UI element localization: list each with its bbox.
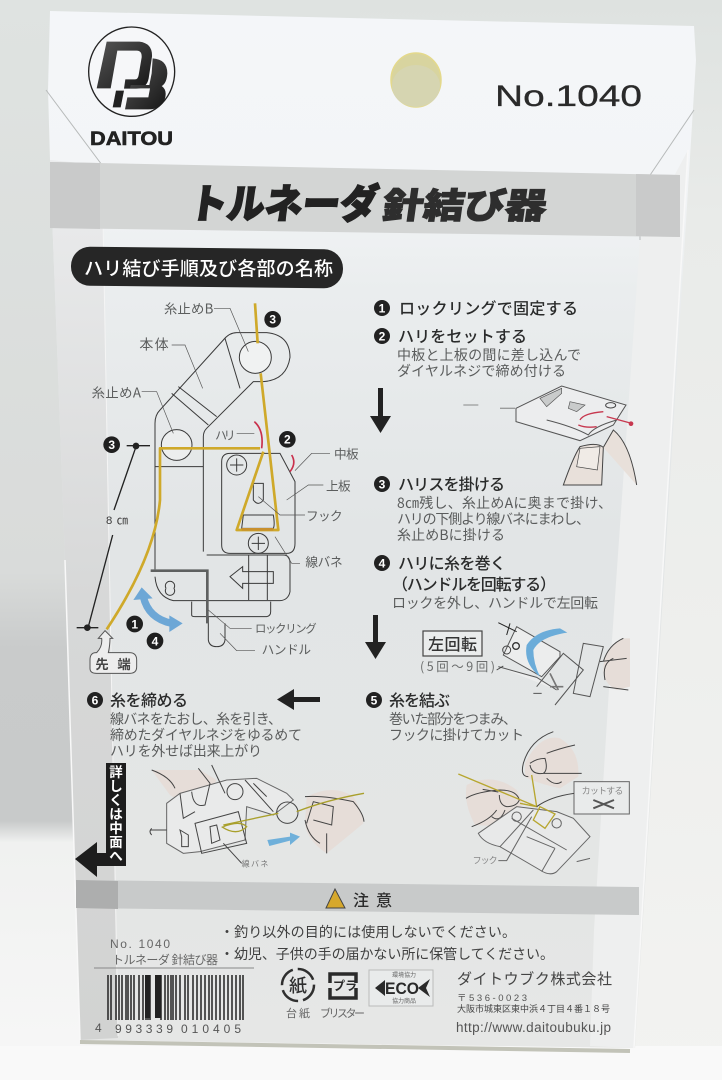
company info: 大阪市城東区東中浜４丁目４番１８号 (457, 1002, 610, 1015)
side note arrow: く (109, 789, 123, 809)
step 3: 8㎝残し、糸止めAに奥まで掛け、 (397, 493, 612, 513)
step 6: ハリを外せば出来上がり (110, 741, 262, 761)
step 4 (374, 550, 598, 613)
icon: plastic recycling: プラ (333, 977, 357, 994)
caution band (76, 880, 639, 915)
step 5: 糸を結ぶ (389, 687, 450, 711)
company info (456, 968, 612, 1035)
product name (94, 937, 254, 968)
title (186, 171, 552, 230)
icon: ECO mark (369, 970, 433, 1006)
step 2: ハリをセットする (398, 323, 527, 347)
step 2: ダイヤルネジで締め付ける (397, 361, 566, 381)
left turn label (420, 631, 495, 675)
hang hole (391, 53, 441, 107)
yellow line (107, 303, 278, 629)
step markers: 4 (152, 634, 159, 648)
step 3: 3 (379, 478, 386, 492)
step 4: ロックを外し、ハンドルで左回転 (392, 593, 598, 613)
part labels: ロックリング (255, 621, 317, 637)
side note arrow: は (109, 803, 123, 823)
icon: ECO mark: ECO (385, 979, 419, 998)
arrow: left (277, 689, 320, 710)
barcode: 010405 (181, 1022, 241, 1036)
recycling captions: ブリスター (320, 1005, 365, 1021)
caution text (220, 922, 554, 964)
step 6: 糸を締める (110, 687, 188, 711)
illustration: tying the knot: フック (473, 853, 498, 866)
step markers: 3 (108, 438, 115, 452)
part labels: 線バネ (305, 552, 343, 571)
step 5: 5 (371, 694, 378, 708)
step 1: 1 (379, 302, 386, 316)
dimension line 8cm: 8 ㎝ (106, 515, 129, 527)
icon: paper recycling: 紙 (289, 972, 307, 998)
illustration: rotating handle (497, 623, 630, 705)
step 3: ハリの下側より線バネにまわし、 (397, 509, 590, 529)
step 4: 4 (379, 556, 386, 570)
barcode: 993339 (115, 1022, 173, 1036)
title: 針結び器 (379, 178, 552, 229)
step markers: 1 (131, 617, 138, 631)
hook needle (254, 422, 294, 472)
step 3 (374, 471, 612, 545)
caution heading: 注意 (353, 887, 392, 911)
illustration: setting hook (463, 386, 637, 485)
step 5: 巻いた部分をつまみ、 (389, 709, 517, 729)
part labels: ハンドル (262, 639, 311, 658)
part labels: 本体 (139, 334, 169, 354)
side note arrow: 詳 (109, 761, 123, 781)
illustration: tying the knot (458, 732, 629, 874)
step 3: 糸止めBに掛ける (397, 525, 505, 545)
rotation arrow (133, 587, 183, 632)
recycling captions (286, 1005, 365, 1021)
company info: http://www.daitoubuku.jp (456, 1020, 611, 1035)
leader lines (142, 308, 330, 651)
product name: トルネーダ 針結び器 (112, 951, 218, 968)
step 1: ロックリングで固定する (399, 295, 578, 319)
part labels: 上板 (326, 476, 351, 495)
diagram: tool with part labels (77, 298, 359, 673)
label: tip: 先端 (95, 654, 131, 673)
recycling captions: 台紙 (286, 1005, 310, 1021)
icon: ECO mark: 協力商品 (392, 996, 416, 1005)
icon: ECO mark: 環境協力 (392, 970, 416, 979)
step 4: （ハンドルを回転する） (392, 571, 556, 595)
step 5: フックに掛けてカット (389, 725, 524, 745)
logo: DB emblem (89, 27, 175, 116)
caution text: ・釣り以外の目的には使用しないでください。 (220, 922, 516, 942)
part labels: ハリ (215, 426, 236, 443)
caution text: ・幼児、子供の手の届かない所に保管してください。 (220, 944, 554, 964)
step 2: 中板と上板の間に差し込んで (397, 345, 581, 365)
arrow: down 1 (370, 388, 391, 433)
product name: No. 1040 (110, 937, 170, 951)
company info: ダイトウブク株式会社 (457, 968, 612, 989)
step 5 (366, 687, 524, 745)
illustration: tightening the line (150, 765, 364, 870)
section heading pill (71, 247, 343, 288)
lock ring (151, 571, 207, 623)
logo wordmark: DAITOU (90, 129, 173, 150)
step 4: ハリに糸を巻く (398, 550, 506, 574)
dimension line 8cm (77, 443, 150, 631)
section heading pill: ハリ結び手順及び各部の名称 (84, 254, 333, 281)
title band (50, 162, 680, 237)
part labels: フック (306, 506, 343, 525)
model number: No.1040 (495, 80, 642, 113)
icon: plastic recycling (330, 974, 357, 998)
arrow: down 2 (365, 615, 386, 659)
title: トルネーダ (186, 171, 383, 230)
step markers: 2 (284, 433, 291, 447)
step 2: 2 (379, 330, 386, 344)
side note arrow: 面 (109, 831, 123, 851)
part labels (92, 298, 359, 658)
barcode: 4 (95, 1021, 102, 1035)
left turn label: 左回転 (428, 631, 477, 655)
icon: paper recycling (282, 969, 314, 1001)
caution heading (326, 887, 392, 911)
illustration: tightening the line: 線バネ (242, 859, 268, 870)
step 6: 6 (92, 694, 99, 708)
part labels: 中板 (334, 444, 359, 463)
step 6: 線バネをたおし、糸を引き、 (110, 709, 282, 729)
step markers (103, 311, 296, 649)
step markers: 3 (269, 313, 276, 327)
company info: 〒536-0023 (457, 993, 527, 1004)
tool body outline (155, 333, 295, 647)
step 6 (87, 687, 302, 761)
step 6: 締めたダイヤルネジをゆるめて (110, 725, 302, 745)
left turn label: (5回〜9回) (420, 656, 495, 675)
label: tip (90, 631, 137, 673)
step 3: ハリスを掛ける (398, 471, 505, 495)
step 2 (374, 323, 581, 381)
illustration: tying the knot: カットする (582, 784, 623, 797)
barcode (95, 975, 243, 1036)
part labels: 糸止めA (92, 382, 142, 401)
side note arrow: し (109, 775, 123, 795)
side note arrow: へ (109, 845, 123, 865)
part labels: 糸止めB (164, 298, 214, 317)
side note arrow: 中 (109, 817, 123, 837)
side note arrow (75, 761, 126, 877)
